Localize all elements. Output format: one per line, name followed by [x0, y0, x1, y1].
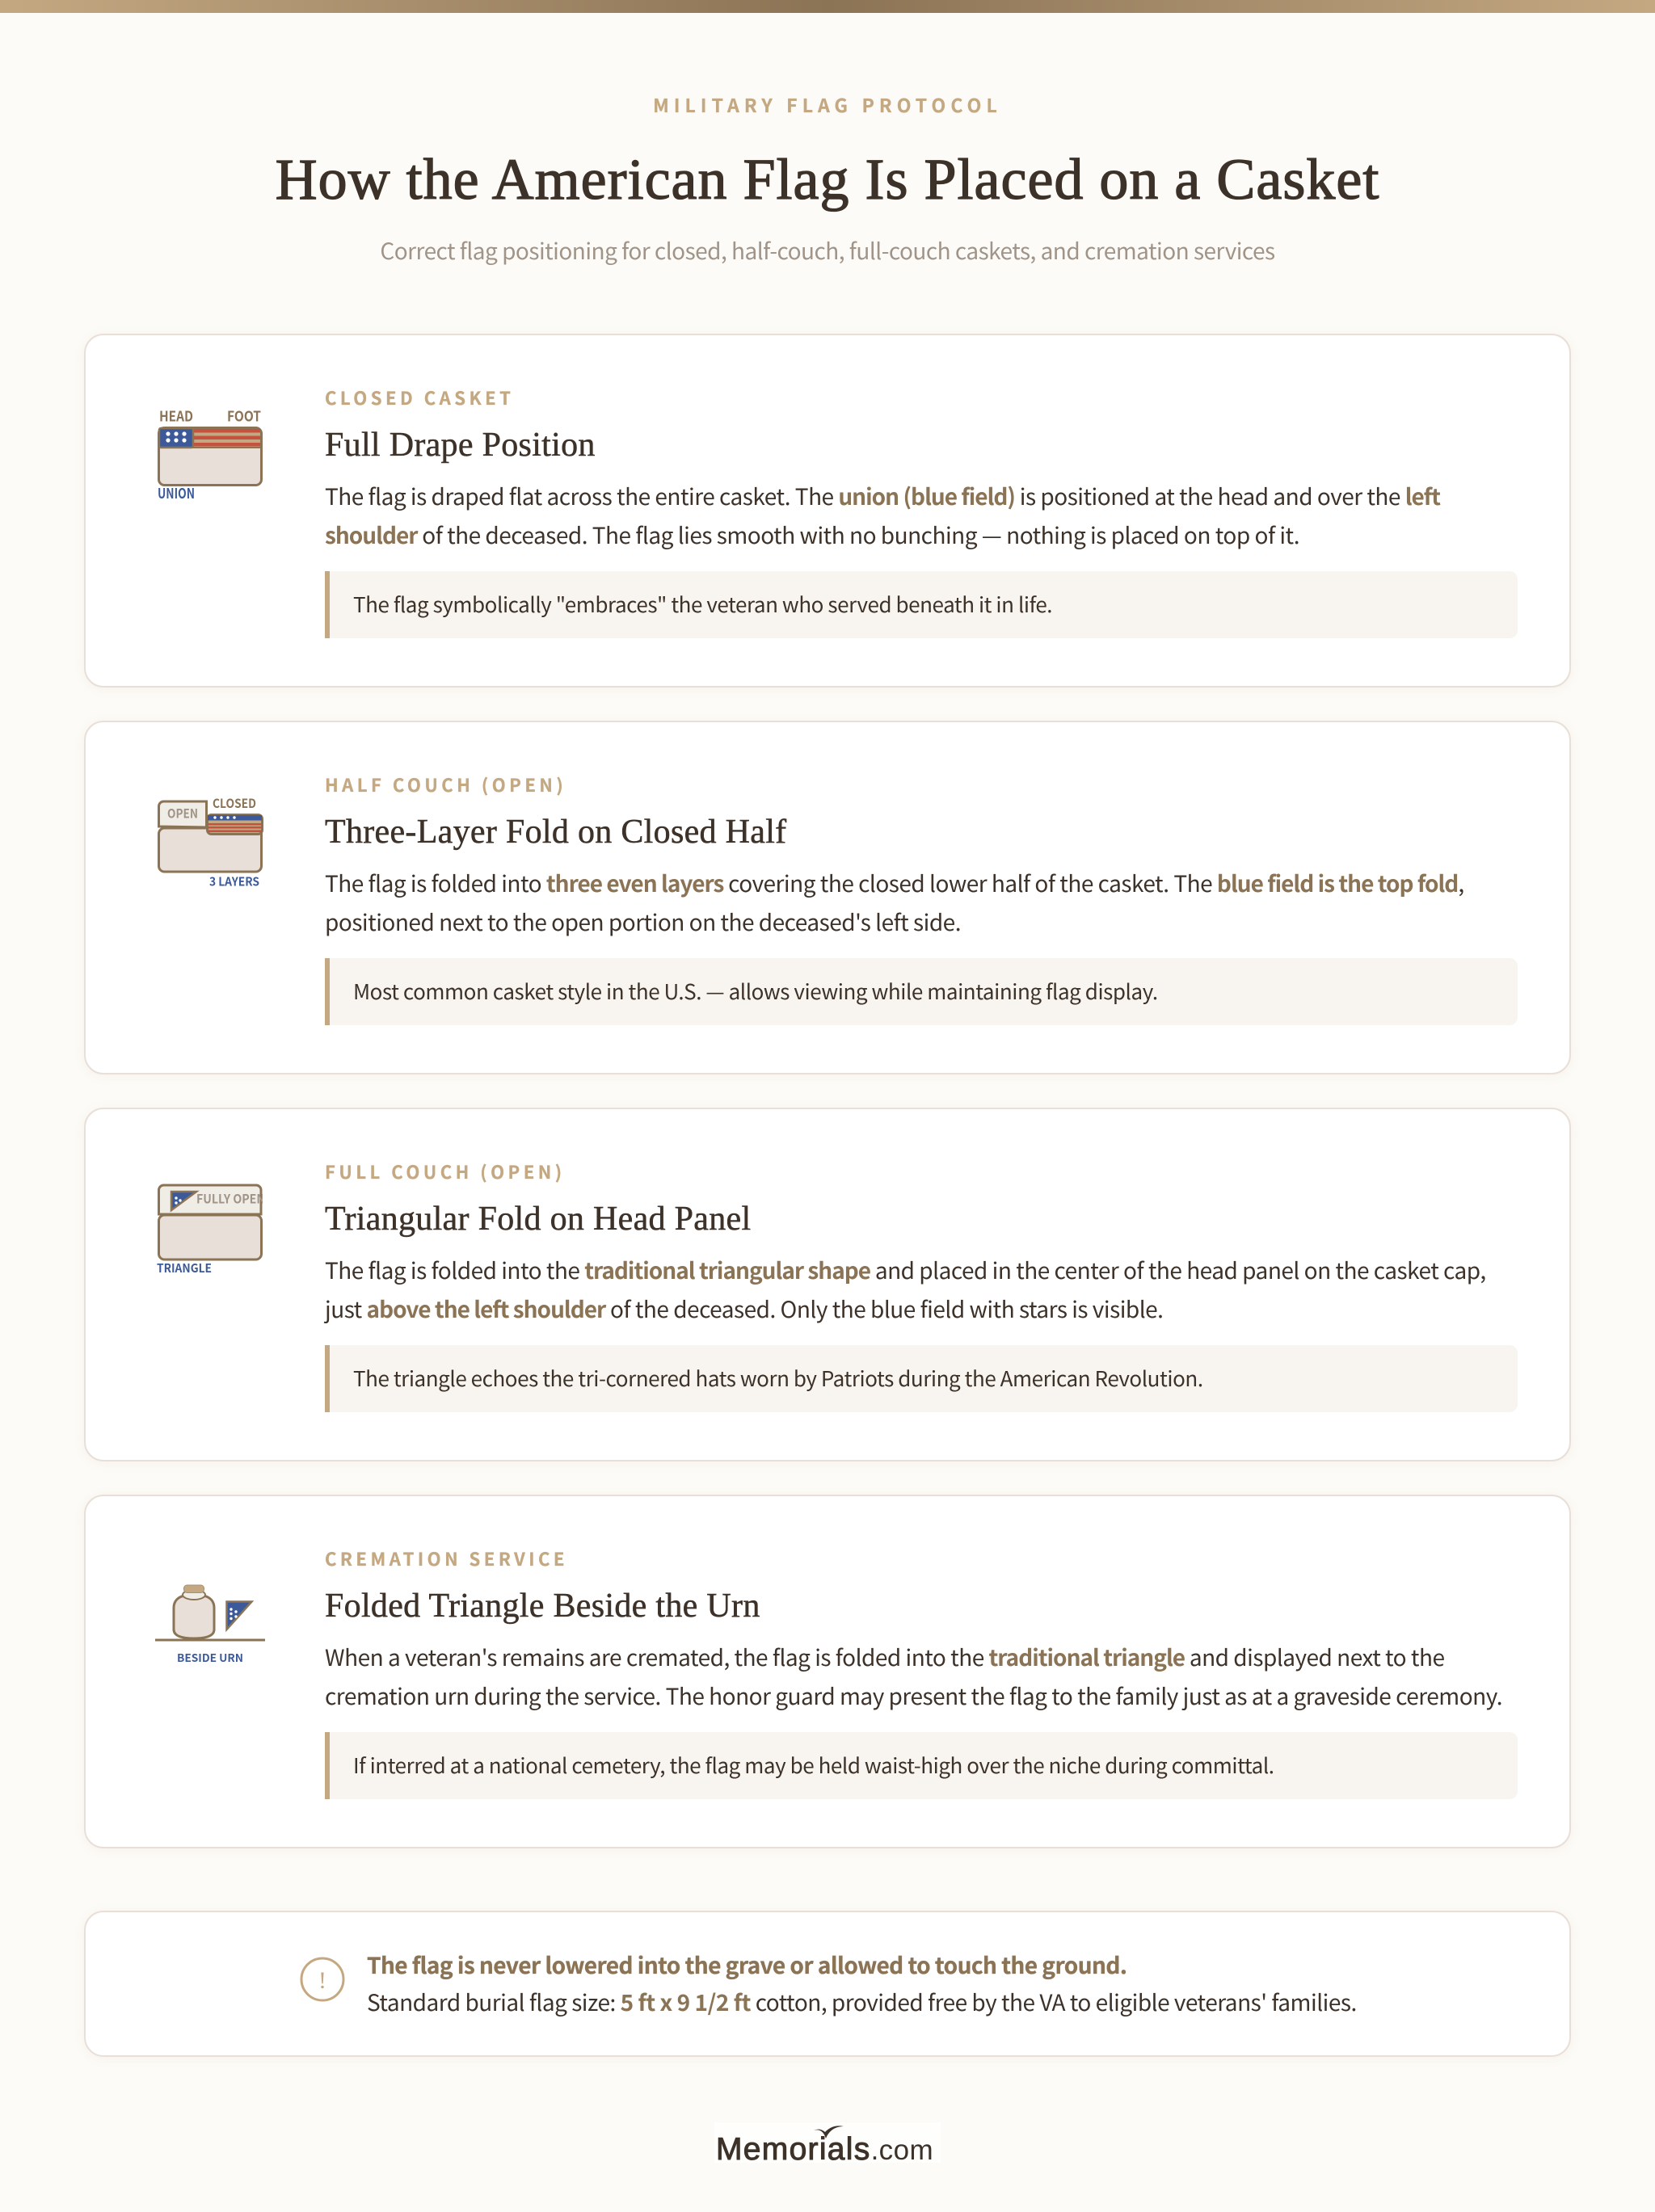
heading: triangular fold: Triangular Fold on Head Panel: [325, 1201, 751, 1238]
icon: closed casket diagram: UNION: [158, 483, 195, 503]
subtitle: Correct flag positioning for closed, half-couch, full-couch caskets, and cremation services: [380, 234, 1275, 267]
heading: three-layer fold: Three-Layer Fold on Closed Half: [325, 814, 786, 851]
title: How the American Flag Is Placed on a Casket: [276, 147, 1379, 212]
body text line 2: cremation: cremation urn during the service. The honor guard may present the flag to the family just as at a graveside ceremony.: [325, 1680, 1502, 1712]
icon: half couch diagram: OPEN: [167, 805, 198, 822]
label: half couch: HALF COUCH (OPEN): [325, 772, 566, 797]
top gradient bar: [0, 0, 1655, 13]
body text line 2: full couch: just above the left shoulder of the deceased. Only the blue field with stars is visible.: [325, 1293, 1163, 1325]
panel: half couch: [84, 721, 1571, 1074]
icon: urn and folded flag diagram: BESIDE URN: [177, 1649, 243, 1665]
callout: tri-cornered hats: [325, 1345, 1518, 1412]
eyebrow: military flag protocol: MILITARY FLAG PROTOCOL: [653, 90, 1002, 118]
callout: most common: [325, 958, 1518, 1025]
callout: national cemetery: If interred at a national cemetery, the flag may be held waist-high over the niche during committal.: [353, 1750, 1274, 1780]
body text line 2: closed casket: shoulder of the deceased. The flag lies smooth with no bunching — nothing is placed on top of it.: [325, 519, 1299, 551]
logo bird: [814, 2126, 844, 2138]
icon: exclamation circle: !: [318, 1967, 326, 1994]
icon: half couch diagram: CLOSED: [213, 794, 256, 812]
icon: half couch diagram: 3 LAYERS: [209, 873, 259, 890]
panel: closed casket: [84, 334, 1571, 688]
logo: Memorials.com: [714, 2122, 941, 2163]
icon: closed casket diagram: HEAD: [159, 406, 193, 427]
heading: folded triangle: Folded Triangle Beside the Urn: [325, 1588, 760, 1625]
logo wordmark: Memorials.com: [716, 2132, 933, 2167]
callout: most common: Most common casket style in the U.S. — allows viewing while maintaining flag display.: [353, 976, 1158, 1006]
body text: full couch: The flag is folded into the traditional triangular shape and placed in the center of the head panel on the casket cap,: [325, 1254, 1486, 1286]
callout: embraces: The flag symbolically "embraces" the veteran who served beneath it in life.: [353, 589, 1052, 619]
label: cremation service: CREMATION SERVICE: [325, 1545, 568, 1571]
icon: full couch diagram: FULLY OPEN: [196, 1189, 265, 1207]
label: closed casket: CLOSED CASKET: [325, 385, 514, 410]
notice headline: The flag is never lowered into the grave or allowed to touch the ground.: [367, 1949, 1126, 1981]
callout: embraces: [325, 571, 1518, 638]
callout: national cemetery: [325, 1732, 1518, 1799]
panel: flag rule notice: [84, 1911, 1571, 2057]
label: full couch: FULL COUCH (OPEN): [325, 1159, 566, 1184]
notice detail: Standard burial flag size: 5 ft x 9 1/2 ft cotton, provided free by the VA to eligible veterans' families.: [367, 1986, 1357, 2018]
heading: full drape position: Full Drape Position: [325, 427, 596, 464]
icon: closed casket diagram: FOOT: [227, 406, 261, 427]
icon: exclamation circle: [301, 1957, 344, 2002]
body text: closed casket: The flag is draped flat across the entire casket. The union (blue field) is positioned at the head and over the left: [325, 480, 1440, 512]
body text line 2: half couch: positioned next to the open portion on the deceased's left side.: [325, 906, 961, 938]
body text: cremation: When a veteran's remains are cremated, the flag is folded into the traditional triangle and displayed next to the: [325, 1641, 1444, 1673]
panel: full couch: [84, 1108, 1571, 1461]
body text: half couch: The flag is folded into three even layers covering the closed lower half of the casket. The blue field is the top fold,: [325, 867, 1464, 899]
callout: tri-cornered hats: The triangle echoes the tri-cornered hats worn by Patriots during the American Revolution.: [353, 1363, 1203, 1393]
icon: full couch diagram: TRIANGLE: [157, 1259, 212, 1276]
panel: cremation service: [84, 1495, 1571, 1848]
icon: full couch diagram: [157, 1184, 263, 1272]
